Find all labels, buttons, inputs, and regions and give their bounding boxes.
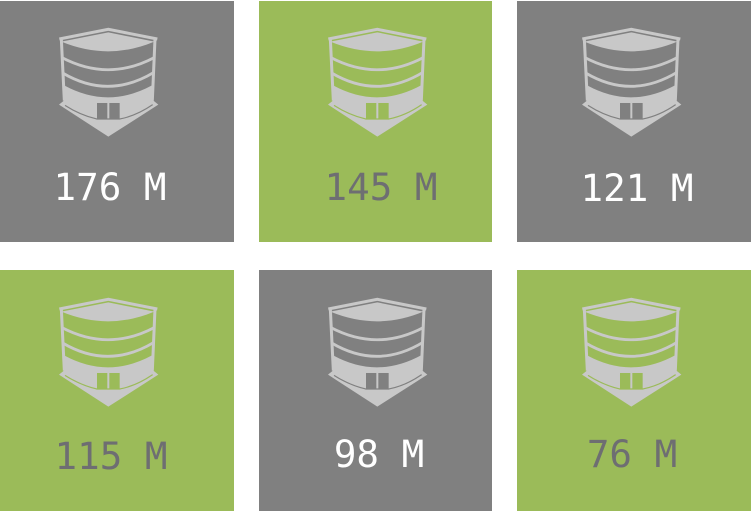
value: 98 M	[334, 432, 424, 476]
panel: 115 M	[0, 270, 234, 511]
icon: building	[328, 29, 427, 137]
panel: 176 M	[0, 1, 234, 242]
icon: building	[582, 299, 681, 407]
value: 76 M	[587, 432, 677, 476]
value: 121 M	[581, 166, 693, 210]
panel: 121 M	[517, 1, 751, 242]
icon: building	[328, 299, 427, 407]
value: 145 M	[325, 165, 437, 209]
value: 115 M	[55, 434, 167, 478]
panel: 76 M	[517, 270, 751, 511]
icon: building	[59, 299, 158, 407]
value: 176 M	[54, 165, 166, 209]
panel: 98 M	[259, 270, 492, 511]
icon: building	[59, 29, 158, 137]
panel: 145 M	[259, 1, 492, 242]
icon: building	[582, 29, 681, 137]
